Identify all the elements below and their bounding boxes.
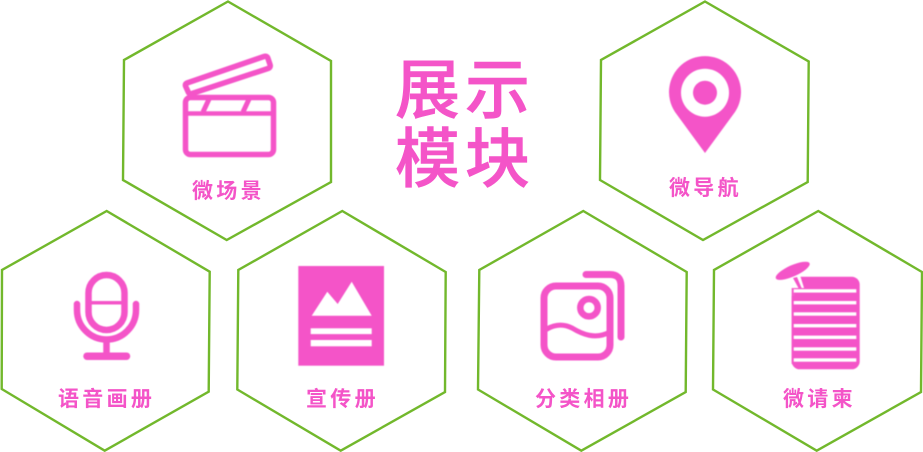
title: 模块 [395,122,535,196]
icon: photo album [544,274,621,357]
icon: clapperboard [185,56,274,154]
label: 微请柬: 微请柬 [783,388,856,411]
panel: 语音画册 [2,211,210,451]
panel: 微导航 [600,2,809,240]
label: 宣传册: 宣传册 [306,388,379,411]
label: 语音画册: 语音画册 [58,387,155,411]
title: 展示 [395,54,535,126]
icon: microphone [77,275,136,356]
label: 微导航: 微导航 [669,176,742,200]
label: 微场景: 微场景 [192,180,265,203]
icon: map pin [669,56,741,153]
panel: 分类相册 [478,211,687,451]
panel: 微请柬 [713,211,922,451]
panel: 微场景 [123,2,331,240]
title [395,54,535,196]
icon: invitation card [774,258,860,369]
icon: brochure [298,266,384,366]
label: 分类相册: 分类相册 [535,388,632,411]
panel: 宣传册 [237,211,446,451]
